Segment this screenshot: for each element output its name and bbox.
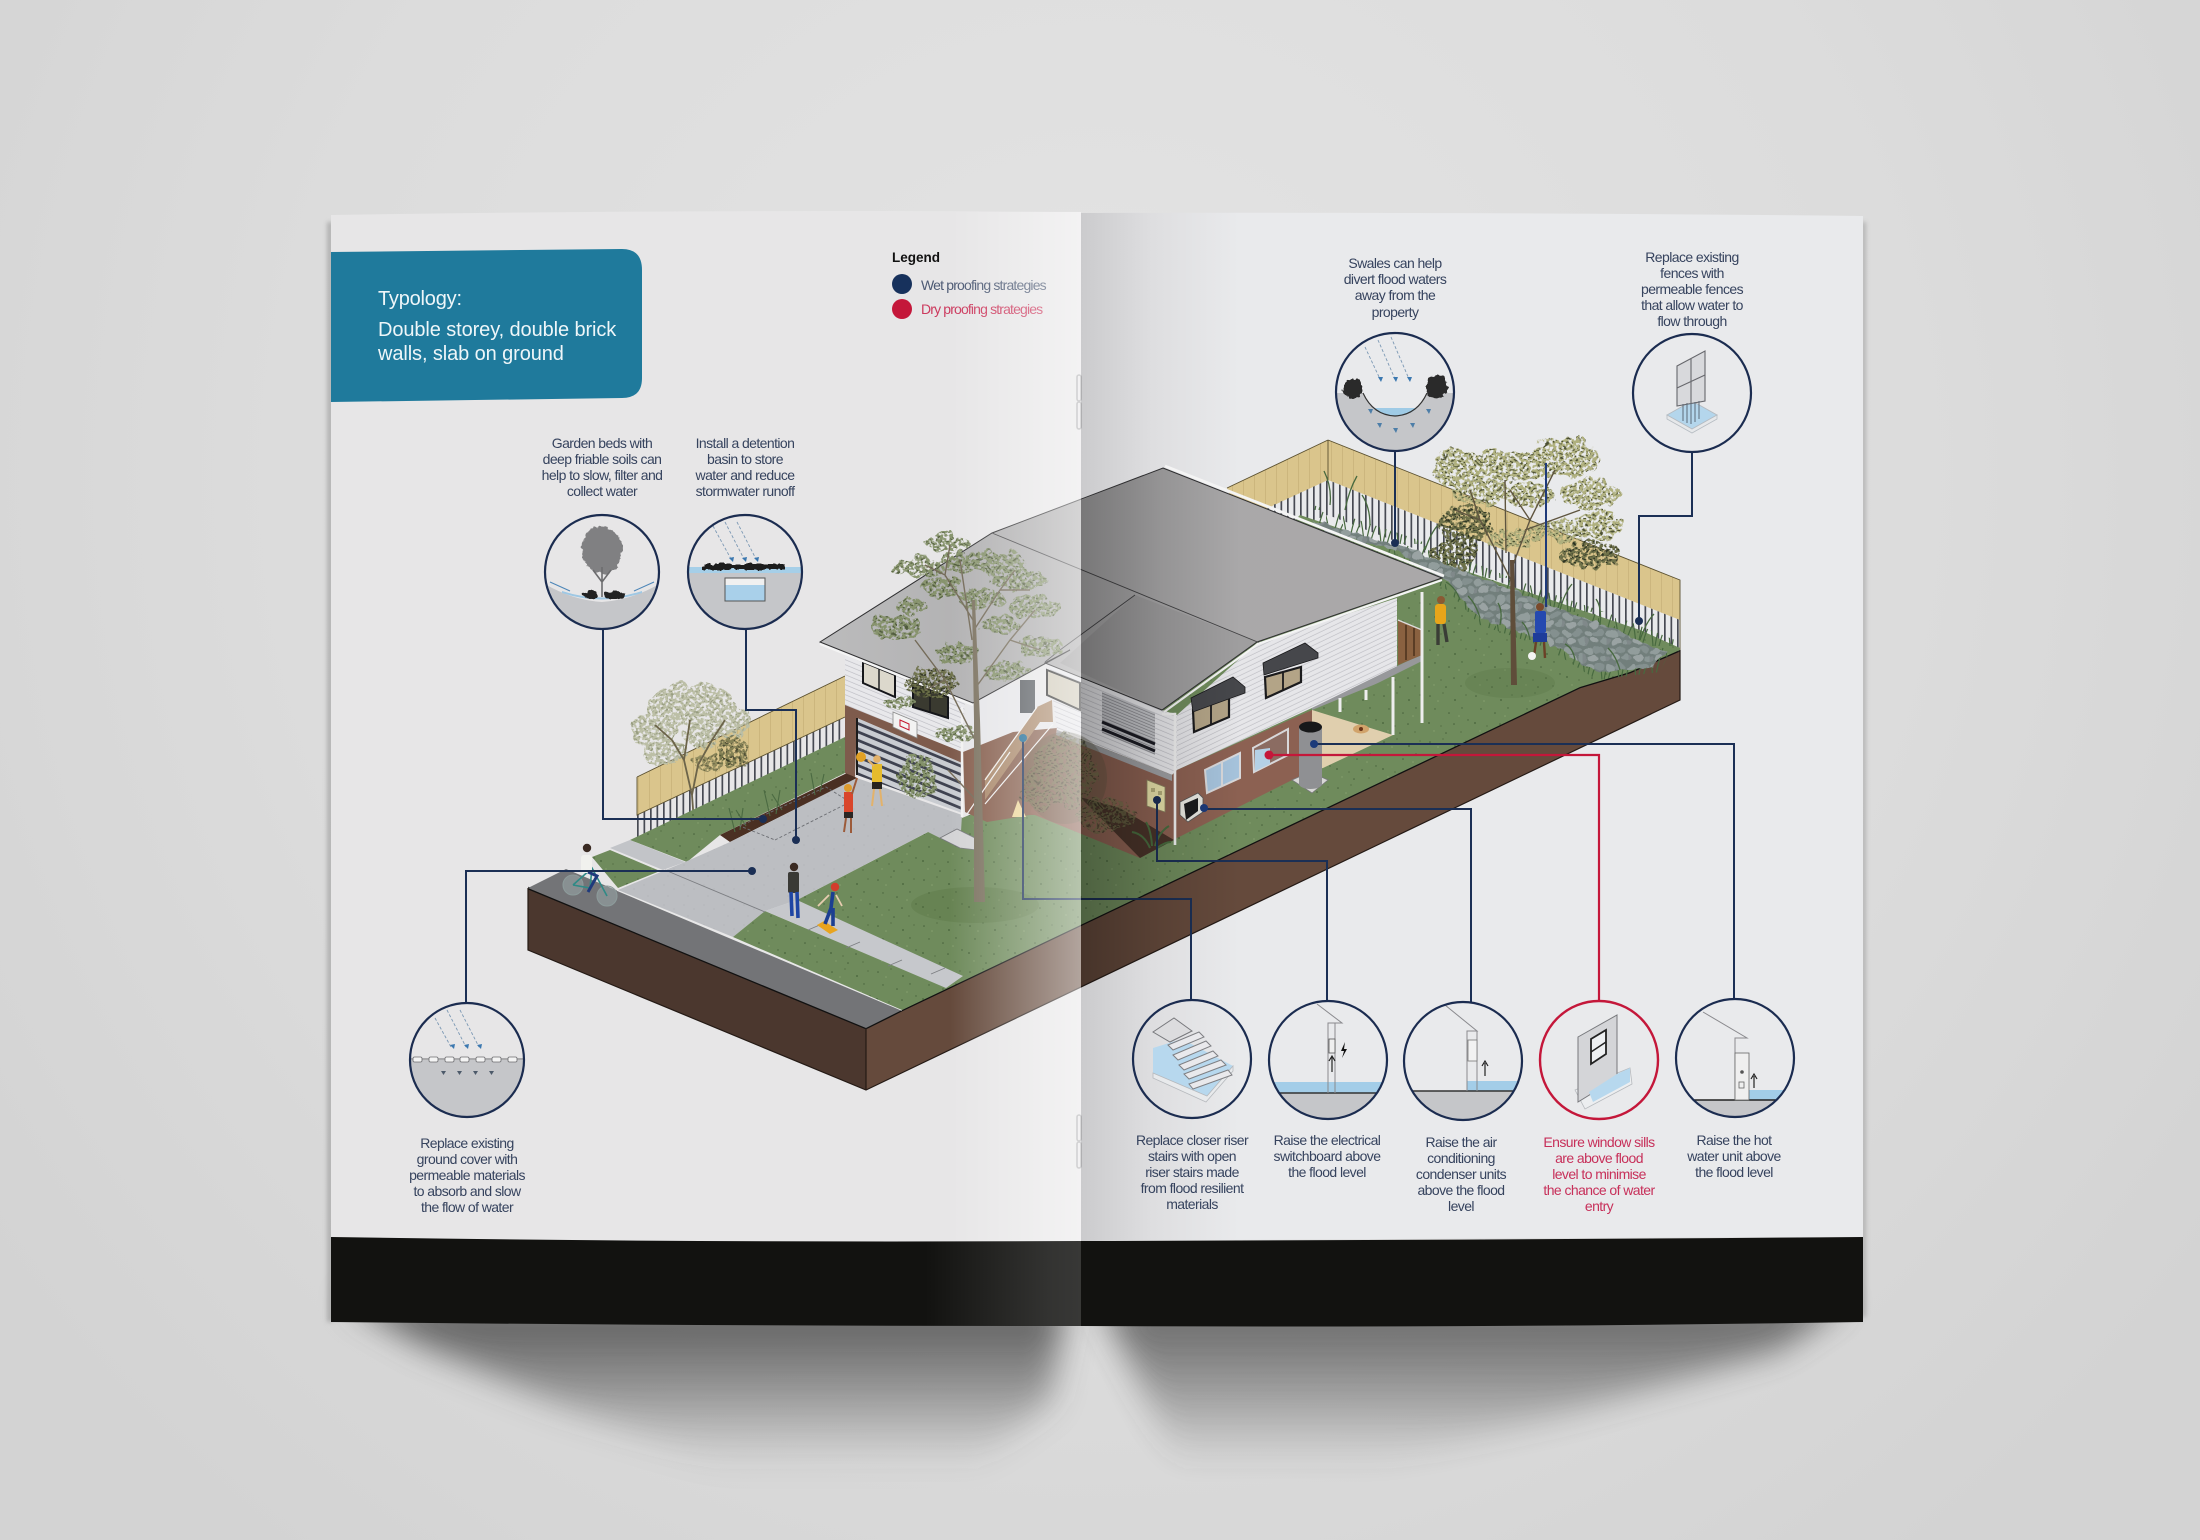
cast shadow under the booklet bbox=[327, 222, 1866, 1475]
legend: Legend bbox=[892, 250, 940, 265]
callout: garden beds: collect water bbox=[567, 483, 638, 499]
title panel: Typology: bbox=[378, 288, 462, 310]
callout: permeable fences bbox=[1546, 249, 1751, 625]
front tree and shrubs bbox=[871, 533, 1133, 902]
callout: air conditioning: level bbox=[1448, 1198, 1474, 1214]
callout: swales: property bbox=[1372, 304, 1419, 320]
callout: garden beds: Garden beds with bbox=[552, 435, 652, 451]
person in blue and ball bbox=[1528, 603, 1547, 660]
seated person near stairs bbox=[1012, 800, 1026, 817]
gutter shade over artwork on right page bbox=[1081, 468, 1240, 987]
person with backpack bbox=[788, 863, 799, 918]
corner downpipe bbox=[1162, 714, 1175, 845]
verge, footpath and driveway bbox=[592, 668, 1555, 1010]
booklet: left and right pages bbox=[331, 211, 1863, 1326]
callout: window sills: entry bbox=[1585, 1198, 1614, 1214]
front garden bed with palm bbox=[1080, 797, 1174, 858]
recessed wall and stair bay bbox=[940, 680, 1057, 850]
callout: garden beds: deep friable soils can bbox=[543, 451, 661, 467]
house bbox=[820, 466, 1444, 858]
player in yellow and ball bbox=[856, 752, 882, 806]
callout: permeable ground cover bbox=[409, 867, 756, 1215]
callout: air conditioning: Raise the air bbox=[1425, 1134, 1497, 1150]
cyclist bbox=[563, 844, 617, 906]
callout: permeable ground cover: the flow of water bbox=[421, 1199, 514, 1215]
title panel: Double storey, double brick bbox=[378, 319, 617, 341]
callout: hot water unit: the flood level bbox=[1695, 1164, 1773, 1180]
small street tree bbox=[631, 683, 750, 836]
soil block bbox=[528, 650, 1680, 1090]
callout: swales: divert flood waters bbox=[1344, 271, 1447, 287]
callout: stairs: riser stairs made bbox=[1145, 1164, 1240, 1180]
gutter highlight on left page bbox=[950, 212, 1081, 1241]
windows with awnings bbox=[1191, 643, 1318, 793]
callout: window sills: level to minimise bbox=[1552, 1166, 1647, 1182]
front wing walls bbox=[1030, 665, 1177, 858]
callout: stairs: Replace closer riser bbox=[1136, 1132, 1249, 1148]
callout: window sills: the chance of water bbox=[1543, 1182, 1655, 1198]
callout: hot water unit: Raise the hot bbox=[1697, 1132, 1772, 1148]
title panel bbox=[331, 249, 642, 402]
spine staples bbox=[1077, 375, 1081, 1168]
callout: detention basin: stormwater runoff bbox=[696, 483, 795, 499]
garage downpipe bbox=[961, 707, 963, 817]
electrical switchboard bbox=[1147, 780, 1165, 812]
callout: swales: away from the bbox=[1355, 287, 1436, 303]
hot water unit bbox=[1292, 722, 1328, 793]
callout: permeable fences: permeable fences bbox=[1641, 281, 1744, 297]
callout: hot water unit bbox=[1310, 740, 1795, 1180]
callout: garden beds: help to slow, filter and bbox=[542, 467, 662, 483]
road bbox=[528, 869, 902, 1028]
callout: swales: Swales can help bbox=[1348, 255, 1442, 271]
callout: hot water unit: water unit above bbox=[1686, 1148, 1782, 1164]
callout: permeable fences: fences with bbox=[1660, 265, 1724, 281]
garage wing bbox=[845, 655, 965, 813]
callout: detention basin: basin to store bbox=[707, 451, 784, 467]
callout: stairs bbox=[1019, 734, 1251, 1212]
back and side fences bbox=[637, 440, 1680, 838]
rear tree bbox=[1431, 438, 1624, 685]
callout: garden beds bbox=[542, 435, 767, 823]
callout: detention basin: water and reduce bbox=[695, 467, 795, 483]
callout: switchboard: switchboard above bbox=[1274, 1148, 1381, 1164]
callout: window sills: are above flood bbox=[1555, 1150, 1643, 1166]
people bbox=[563, 596, 1547, 934]
legend: Wet proofing strategies bbox=[921, 277, 1047, 293]
callout: permeable ground cover: permeable materials bbox=[409, 1167, 525, 1183]
callout: switchboard: the flood level bbox=[1288, 1164, 1366, 1180]
skateboarder bbox=[817, 883, 842, 934]
roof bbox=[820, 466, 1444, 712]
callout: air conditioning: conditioning bbox=[1427, 1150, 1495, 1166]
callout: window sills: Ensure window sills bbox=[1543, 1134, 1655, 1150]
lawn bbox=[797, 515, 1680, 1010]
callout: permeable fences: Replace existing bbox=[1645, 249, 1739, 265]
callout: switchboard: Raise the electrical bbox=[1274, 1132, 1381, 1148]
callout: detention basin bbox=[688, 435, 802, 844]
side wall bbox=[1177, 598, 1422, 838]
deck and covered area bbox=[1312, 588, 1422, 770]
callout: window sills bbox=[1264, 750, 1658, 1214]
player in red bbox=[844, 778, 857, 833]
callout: swales bbox=[1335, 255, 1455, 547]
callout: permeable ground cover: Replace existing bbox=[420, 1135, 514, 1151]
callout: air conditioning bbox=[1200, 804, 1523, 1214]
air conditioning unit bbox=[1180, 793, 1203, 822]
callout: stairs: stairs with open bbox=[1148, 1148, 1236, 1164]
callout: permeable ground cover: ground cover with bbox=[417, 1151, 517, 1167]
side lawn and garden bed bbox=[630, 737, 857, 862]
rock swale and grasses bbox=[1313, 471, 1675, 680]
callout: stairs: from flood resilient bbox=[1141, 1180, 1244, 1196]
callout: air conditioning: above the flood bbox=[1417, 1182, 1505, 1198]
callout: switchboard bbox=[1153, 796, 1388, 1180]
basketball hoop bbox=[893, 712, 917, 738]
callout: permeable fences: flow through bbox=[1657, 313, 1727, 329]
callout: stairs: materials bbox=[1166, 1196, 1218, 1212]
legend: Dry proofing strategies bbox=[921, 301, 1043, 317]
callout: permeable fences: that allow water to bbox=[1641, 297, 1744, 313]
person in orange bbox=[1435, 596, 1447, 645]
callout: permeable ground cover: to absorb and slow bbox=[413, 1183, 522, 1199]
isometric house illustration bbox=[528, 438, 1680, 1090]
callout: detention basin: Install a detention bbox=[696, 435, 794, 451]
legend bbox=[892, 250, 1047, 319]
callout: air conditioning: condenser units bbox=[1416, 1166, 1507, 1182]
title panel: walls, slab on ground bbox=[377, 343, 564, 365]
